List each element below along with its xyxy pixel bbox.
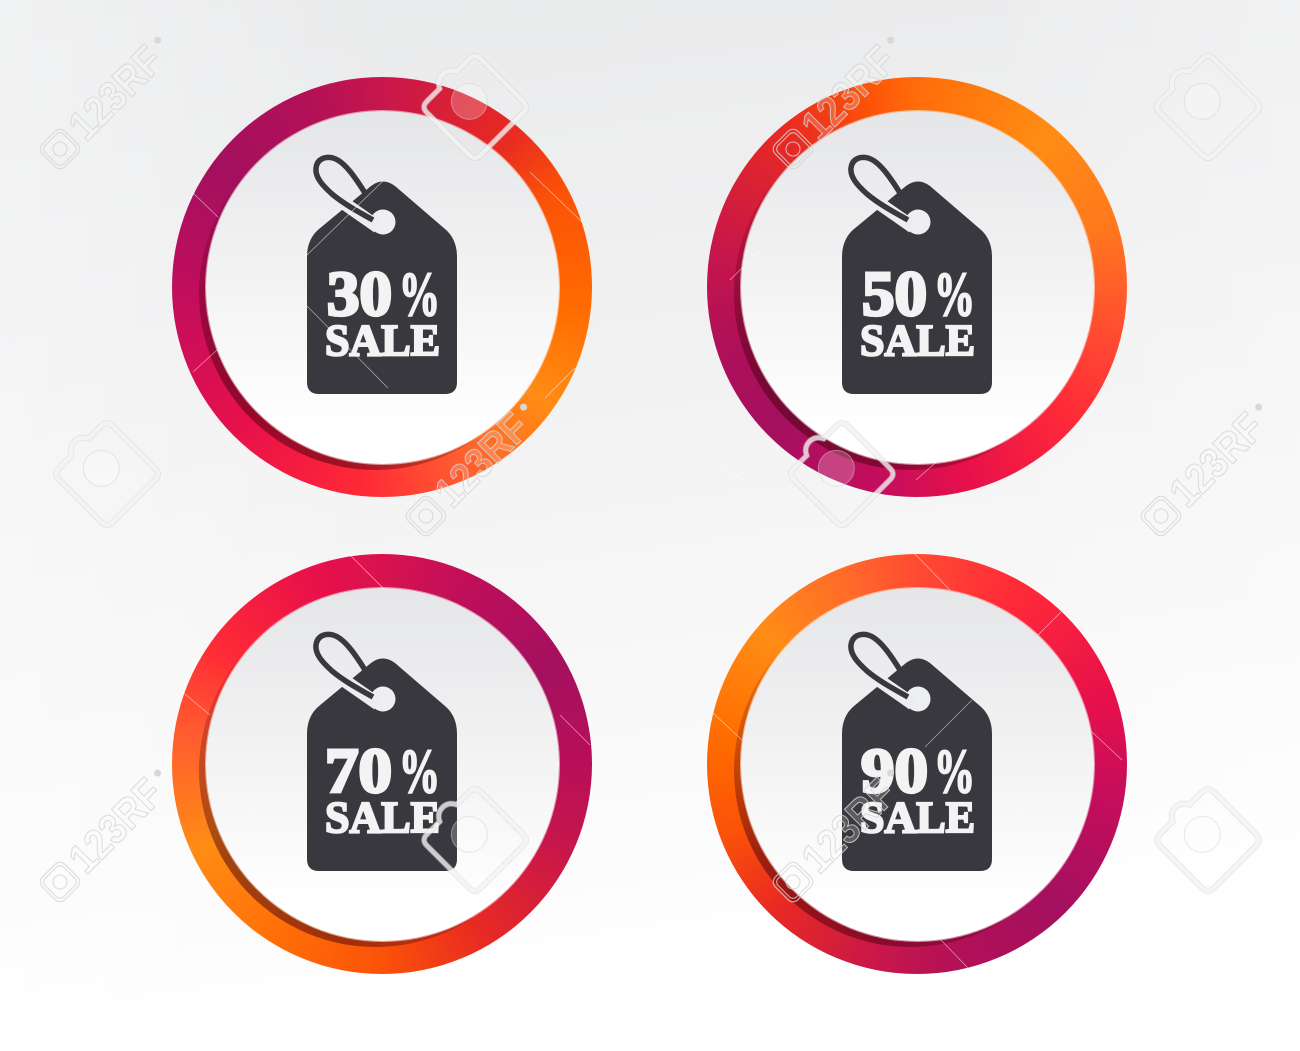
icon: price tag: SALE — [860, 793, 975, 842]
watermark stamp — [416, 48, 529, 161]
watermark logo — [32, 759, 182, 910]
watermark logo — [32, 26, 182, 177]
watermark stamp — [416, 781, 529, 894]
icon: price tag: 70 — [325, 736, 392, 806]
ring shadow — [199, 594, 552, 947]
inner disc — [206, 111, 559, 464]
panel: 30% sale — [172, 77, 592, 497]
watermark logo — [398, 393, 548, 544]
inner disc — [206, 588, 559, 941]
icon: price tag: % — [399, 738, 440, 806]
gradient ring — [172, 77, 592, 497]
ring shadow — [734, 594, 1087, 947]
icon: price tag: SALE — [860, 316, 975, 365]
icon: price tag — [307, 632, 457, 871]
icon: price tag: SALE — [325, 793, 440, 842]
icon: price tag — [842, 632, 992, 871]
gradient ring — [172, 554, 592, 974]
watermark logo — [1133, 393, 1283, 544]
icon: price tag — [842, 154, 992, 394]
icon: price tag: % — [399, 261, 440, 329]
inner disc — [741, 111, 1094, 464]
watermark logo — [765, 26, 915, 177]
icon: price tag: 30 — [327, 259, 392, 329]
watermark logo: 123RF — [792, 770, 905, 882]
watermark logo — [765, 759, 915, 910]
panel: 90% sale — [707, 554, 1127, 974]
inner disc — [741, 588, 1094, 941]
watermark logo: 123RF — [1160, 404, 1273, 516]
gradient ring — [707, 77, 1127, 497]
watermark stamp — [48, 415, 161, 528]
ring shadow — [734, 117, 1087, 470]
ring shadow — [199, 117, 552, 470]
icon: price tag: 50 — [862, 259, 927, 329]
icon: price tag — [307, 154, 457, 394]
panel: 70% sale — [172, 554, 592, 974]
watermark stamp — [1149, 48, 1262, 161]
panel: 50% sale — [707, 77, 1127, 497]
watermark logo: 123RF — [59, 37, 172, 149]
watermark logo: 123RF — [792, 37, 905, 149]
watermark logo: 123RF — [59, 770, 172, 882]
watermark stamp — [783, 415, 896, 528]
icon: price tag: SALE — [325, 316, 440, 365]
icon: price tag: % — [934, 261, 975, 329]
icon: price tag: % — [934, 738, 975, 806]
watermark stamp — [1149, 781, 1262, 894]
icon: price tag: 90 — [861, 736, 928, 806]
gradient ring — [707, 554, 1127, 974]
watermark logo: 123RF — [425, 404, 538, 516]
